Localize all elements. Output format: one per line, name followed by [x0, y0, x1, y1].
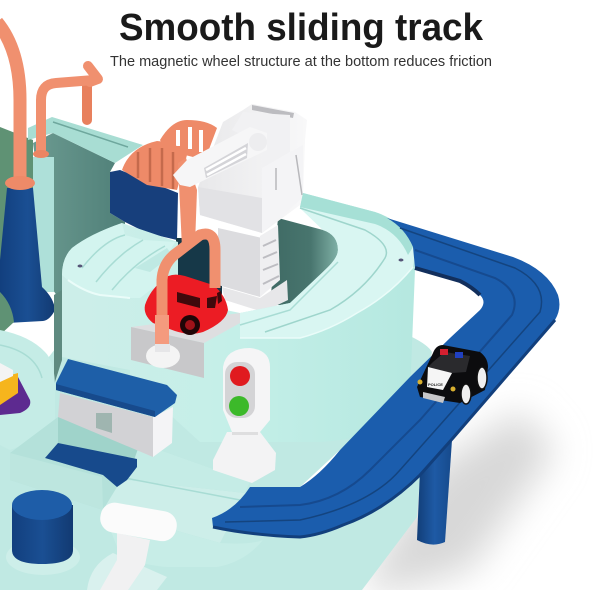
house — [56, 359, 177, 457]
back wall — [28, 117, 143, 300]
orange pipe vertical — [178, 158, 197, 248]
spiral track top surface — [62, 193, 414, 338]
front lobe under road — [103, 510, 263, 567]
white lever — [87, 500, 179, 590]
left curved track piece — [0, 330, 55, 450]
blue round button — [6, 490, 80, 575]
police car: POLICE — [428, 382, 443, 387]
grey notch — [131, 327, 204, 378]
crane tower — [198, 104, 307, 312]
mint base plate — [0, 337, 432, 590]
pit behind tower — [270, 218, 338, 305]
crane arm — [173, 127, 267, 187]
blue track — [212, 218, 559, 537]
traffic light — [213, 348, 276, 483]
lower wall and road — [10, 417, 250, 543]
orange arch back — [160, 120, 217, 160]
wall dark side strip — [54, 290, 62, 385]
back left green block — [0, 127, 33, 300]
mint pipe support — [33, 157, 54, 292]
navy block — [110, 170, 178, 240]
orange loop pipe — [162, 234, 215, 340]
base of orange pipe — [146, 315, 180, 368]
navy cone post — [0, 188, 55, 335]
track support post — [417, 440, 452, 545]
tower lattice column — [218, 225, 288, 312]
tall orange pipe with collar — [0, 22, 35, 190]
white floor under car — [131, 313, 240, 343]
orange arch front — [122, 141, 187, 190]
police car — [417, 345, 488, 404]
orange pipe bent with arrow top — [33, 66, 98, 158]
red car — [145, 275, 228, 335]
title: Smooth sliding track — [119, 7, 484, 49]
small blue ramp — [45, 443, 137, 487]
yellow and purple toy — [0, 363, 30, 415]
central mint tower wall — [62, 193, 415, 442]
subtitle: The magnetic wheel structure at the bottom reduces friction — [110, 54, 492, 70]
dark gap behind loop pipe — [176, 238, 222, 300]
floor shadow — [360, 410, 555, 590]
